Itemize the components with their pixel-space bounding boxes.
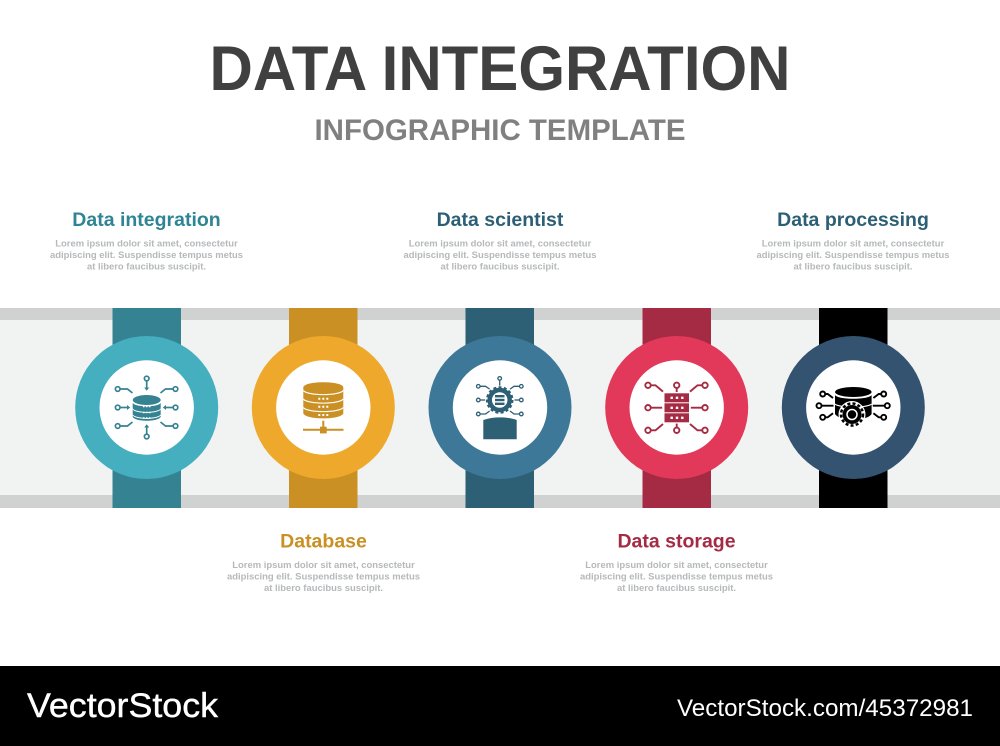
text block: Data integration: Data integration	[72, 209, 221, 231]
icon: database with incoming connections	[115, 376, 178, 439]
text block: Data scientist: adipiscing elit. Suspendisse tempus metus	[404, 250, 596, 261]
panel: step 4 data storage	[605, 308, 748, 508]
text block: Data storage	[580, 530, 773, 594]
panel: step 1 data integration	[75, 308, 218, 508]
icon: database on network	[303, 382, 344, 433]
horizontal band	[0, 308, 1000, 508]
text block: Database: at libero faucibus suscipit.	[264, 583, 383, 594]
footer logo: VectorStock	[27, 687, 219, 725]
footer url: VectorStock.com/45372981	[677, 695, 973, 722]
icon: server with connections	[645, 383, 708, 433]
text block: Data integration: Lorem ipsum dolor sit amet, consectetur	[55, 238, 238, 250]
panel: step 5 data processing	[782, 308, 925, 508]
icon: gear with person and connections	[476, 377, 523, 439]
text block: Database	[227, 530, 420, 594]
text block: Data integration: adipiscing elit. Suspendisse tempus metus	[50, 250, 243, 261]
panel: step 2 database	[252, 308, 395, 508]
text block: Data scientist: Lorem ipsum dolor sit amet, consectetur	[409, 238, 592, 250]
text block: Data processing: at libero faucibus suscipit.	[793, 262, 913, 272]
text block: Data processing: Lorem ipsum dolor sit amet, consectetur	[762, 238, 945, 250]
text block: Data storage: adipiscing elit. Suspendisse tempus metus	[580, 572, 773, 582]
subtitle: INFOGRAPHIC TEMPLATE	[314, 114, 686, 147]
text block: Data processing: adipiscing elit. Suspendisse tempus metus	[756, 250, 950, 261]
text block: Data integration: at libero faucibus suscipit.	[87, 262, 206, 272]
text block: Data scientist: Data scientist	[437, 209, 564, 231]
text block: Database: Lorem ipsum dolor sit amet, consectetur	[232, 560, 415, 571]
footer bar	[0, 666, 1000, 746]
icon: database with gear	[816, 387, 890, 428]
text block: Database: adipiscing elit. Suspendisse tempus metus	[227, 572, 420, 582]
text block: Data storage: Lorem ipsum dolor sit amet, consectetur	[585, 560, 768, 571]
text block: Data scientist: at libero faucibus suscipit.	[440, 262, 560, 272]
text block: Data processing	[756, 209, 950, 272]
text block: Data integration	[50, 209, 243, 272]
text block: Data scientist	[404, 209, 596, 272]
text block: Database: Database	[280, 530, 367, 552]
panel: step 3 data scientist	[428, 308, 572, 508]
text block: Data storage: Data storage	[617, 530, 736, 552]
title: DATA INTEGRATION	[210, 34, 790, 104]
text block: Data storage: at libero faucibus suscipit.	[617, 583, 736, 594]
text block: Data processing: Data processing	[777, 209, 929, 231]
